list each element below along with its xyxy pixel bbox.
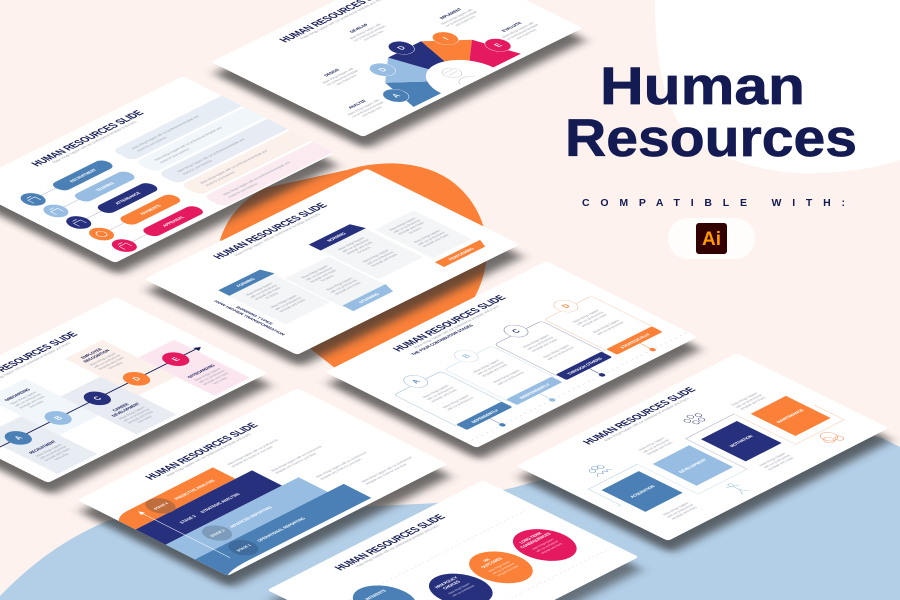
pill: recruitment [53,160,112,190]
card text: Make things happen [388,217,417,231]
band: strategic analysis: STAGE 3 [178,514,198,524]
text blocks: Make things happen [637,437,666,451]
text blocks: template and charts [670,506,699,520]
label: develop: Make things happen with [348,23,382,40]
card B: Make things happen [492,369,521,383]
right text blocks: Make things happen with our professional [315,451,368,478]
label: implement: IMPLEMENT [438,7,463,20]
card text: for teams [264,292,280,299]
header: norming [309,222,366,251]
card B: B [460,353,473,359]
card B: template and charts [481,363,509,377]
slide subtitle: Make things happen with our professional template and charts [165,433,252,477]
sub heading: THE FOUR CONTRIBUTION STAGES [410,323,474,356]
fan chart: D [376,66,390,73]
card B [433,340,578,413]
icon: development figure [724,482,751,495]
text: onboarding [2,387,51,412]
connector lines [40,188,148,242]
cards [0,340,250,474]
slide title: HUMAN RESOURCES SLIDE [211,202,331,261]
card D: STRATEGICALLY [618,332,652,349]
main title [565,57,857,168]
band: operational reporting [195,484,376,576]
circle: interests [340,579,429,600]
band: strategic analysis: STRATEGIC ANALYSIS [199,492,241,514]
card D: with our professional [576,311,605,326]
text: employee recognition: EMPLOYEE [79,347,103,359]
slide: pills list [0,71,345,275]
pill: appraisal [143,206,203,236]
circle: high policy choices: HRM POLICY [433,576,459,589]
pill: attendance [98,183,158,213]
stage circles: STAGE 2 [209,529,226,538]
card text: with our professional [365,251,395,265]
card text: with our professional [273,296,303,311]
square: maintenance [751,396,831,436]
label: analyze: our professional template [350,101,385,118]
square: acquisition [602,471,683,512]
circle: long-term consequences [500,523,589,567]
square: acquisition: ACQUISITION [629,485,656,499]
card A: with our professional [446,396,475,411]
text rows [116,96,333,206]
text: recruitment: Make things happen [34,443,63,458]
text: offboarding: OFFBOARDING [186,363,217,379]
slide: DADIE fan [211,0,586,149]
label: design: Make things happen with [321,67,355,84]
slide subtitle: Make things happen with our professional template and charts [603,397,690,442]
card B: INDEPENDENTLY [518,383,552,400]
card B: Make things happen [472,359,501,373]
card text: Make things happen [413,229,442,244]
serpentine frame [585,389,844,521]
cards [229,207,474,329]
card text: with our professional [249,284,278,299]
card text: Make things happen [325,277,354,291]
card A [382,365,528,438]
text rows: Make things happen with our professional template and [153,126,223,161]
badge: Ai: Ai [702,229,721,250]
right text blocks: Make things happen with our professional [360,456,414,483]
card A: Make things happen [421,384,450,399]
white blob top right [655,0,900,173]
card C: with our professional [546,346,575,361]
label: analyze: and charts here [361,106,384,117]
card text [246,218,448,312]
card text: template and charts [309,269,338,283]
text: employee recognition: here today [107,361,124,370]
slide subtitle: Make things happen with our professional template and charts [355,524,440,568]
card C: with our professional [526,336,555,351]
text: recruitment: with our professional [38,445,68,460]
footer: storming [342,284,397,311]
text: employee recognition: with our professional [93,354,122,369]
label: analyze: ANALYZE [347,99,368,109]
right text blocks: Make things happen with our professional [270,445,323,472]
fan chart: D [395,44,408,51]
card text: Make things happen [361,249,390,263]
text blocks: with our professional [641,439,671,454]
right text blocks [226,413,418,510]
card text: with our professional [392,219,422,234]
text: onboarding: here today [28,400,45,408]
fan chart: I [440,36,451,41]
node B [44,411,72,425]
pill: training: TRAINING [94,181,116,192]
slide: timeline [0,297,271,495]
slide: circles [267,480,642,600]
card text: template and charts [254,286,282,300]
slide subtitle: Make things happen with our professional template and charts [413,305,500,349]
card D [532,290,678,363]
blue blob [0,420,900,600]
text blocks: template and charts [739,396,767,410]
card A: DEPENDENTLY [470,408,500,424]
slide subtitle: Make things happen with our professional template and charts [51,120,138,164]
compatible with: COMPATIBLE WITH: [582,197,845,209]
card text: for teams [320,274,335,282]
circle: high policy choices [416,567,505,600]
slide title: HUMAN RESOURCES SLIDE [29,109,147,168]
circle: long-term consequences: CONSEQUENCES [519,532,552,549]
circle: high policy choices: CHOICES [441,580,462,590]
text: offboarding: here today [212,376,229,385]
band: predictive analysis: PREDICTIVE ANALYSIS [173,479,216,501]
icon: maintenance gears [815,430,845,445]
circle: hr outcomes: OUTCOMES [479,557,504,569]
card text: template and charts [346,241,374,255]
text: career development: template and charts [126,410,155,424]
badge: Ai [668,218,755,259]
card text: Make things happen [269,294,298,309]
circle: hr outcomes: HR [481,557,492,563]
text: offboarding: template and charts [202,371,230,386]
text rows: charts for your business [204,171,237,187]
text: onboarding: with our professional [13,393,43,407]
band: operational reporting: OPERATIONAL REPORTING [256,516,307,542]
text: recruitment: here today [53,452,70,461]
text: offboarding: with our professional [197,369,226,384]
text: career development: with our professional [122,408,151,422]
node C: C [91,395,104,402]
card text: with our professional [304,267,334,281]
square: motivation [701,421,782,461]
text: offboarding [186,363,235,388]
text: onboarding: Make things happen [9,391,38,405]
dotted baseline [466,332,688,443]
text: career development: DEVELOPMENT [110,402,141,418]
circle: long-term consequences: Make things happen [531,538,555,550]
card A: with our professional [425,386,455,401]
pill: payments [120,194,180,224]
card text: template and charts [397,221,425,235]
text: recruitment: RECRUITMENT [27,440,58,455]
text: employee recognition: Make things happen [89,352,117,366]
text blocks [584,390,842,520]
text blocks: with our professional [762,454,792,469]
stage circles [139,494,266,558]
text blocks: Make things happen [758,452,787,467]
square: maintenance: MAINTENANCE [775,408,805,424]
text: recruitment: template and charts [43,447,71,462]
label: design: DESIGN [323,68,341,77]
card C: THROUGH OTHERS [566,357,604,376]
stage circles: STAGE 1 [236,544,252,552]
text rows: Make things happen with our professional template and [199,149,269,184]
text: employee recognition: template and charts [97,356,126,370]
slide: forming norming [144,169,523,367]
band: advanced reporting [166,477,330,560]
slide: four contribution stages [325,261,701,460]
card text: template and charts [421,233,450,248]
text: career development: here today [136,415,153,424]
card D: D [559,303,573,309]
text: employee recognition: RECOGNITION [82,349,111,363]
label: implement: Make things happen with [440,8,474,25]
node D [122,372,150,386]
card text: with our professional [417,231,446,246]
card text: Make things happen [300,265,329,279]
slide subtitle: Make things happen with our professional template and charts [234,213,321,256]
card C: template and charts [530,338,559,352]
card text: with our professional [341,238,370,253]
text blocks: with our professional [734,394,764,409]
main title: Human [600,57,805,116]
text rows: charts for your business [158,147,191,164]
label: evaluate: and charts here [515,28,538,40]
circle: hr outcomes: Make things happen [487,560,512,573]
card text: for teams [356,246,372,254]
timeline arrow [0,346,204,455]
card C: Make things happen [542,344,571,358]
icon: acquisition people [585,463,612,477]
slide: four squares [516,353,892,553]
pill: appraisal: APPRAISAL [161,215,186,227]
node C [84,392,111,406]
vertical arrow [136,510,232,559]
slide: analysis stairs [77,388,451,588]
dotted lines [326,509,609,600]
text: employee recognition [76,346,130,373]
card D: with our professional [596,321,625,336]
slide title: HUMAN RESOURCES SLIDE [391,294,510,353]
pill: payments: PAYMENTS [139,204,162,216]
text: career development: Make things happen [118,406,146,420]
card text: with our professional [329,279,359,294]
label: evaluate: EVALUATE [500,21,523,32]
card A: template and charts [430,389,458,403]
pill: attendance: ATTENDANCE [114,191,142,205]
text: offboarding: Make things happen [193,367,222,382]
pill: recruitment: RECRUITMENT [68,168,98,183]
card B: with our professional [476,361,505,376]
footer: storming: STORMING [357,292,381,304]
rotated side heading: BONDING TYPES [235,306,274,325]
node D: D [130,375,144,382]
label: evaluate: Make things happen with [501,21,535,38]
pill: training [75,172,134,202]
node E [162,352,190,366]
fan chart: A [389,92,403,99]
footer: performing: PERFORMING [447,247,476,261]
text: onboarding: template and charts [18,395,46,409]
label: develop: DEVELOP [348,23,370,33]
circle: long-term consequences: with our professional [535,540,560,553]
circle: hr outcomes [456,545,546,590]
fan chart [370,32,521,107]
card D: Make things happen [592,319,621,334]
card text: Make things happen [245,282,274,296]
circle: hr outcomes: with our professional [491,562,516,575]
header: forming: FORMING [235,277,257,288]
card text: template and charts [334,281,362,295]
icon: motivation network [680,412,709,426]
node A: A [12,434,25,441]
card A: A [409,378,423,385]
slide title: HUMAN RESOURCES SLIDE [581,386,699,446]
label: develop: our professional template [352,25,387,42]
right text blocks: template and charts for your team [230,445,274,468]
footer: performing [435,240,489,267]
card C: C [509,328,523,334]
card D: Make things happen [572,309,600,323]
right text blocks: template and charts for your team [274,452,318,474]
text: career development: CAREER [111,402,131,412]
text rows: charts for your business [181,159,214,175]
stage circles: STAGE 4 [153,502,170,510]
label: design: our professional template [325,69,360,86]
label: analyze: Make things happen with [346,99,381,116]
card C: Make things happen [522,334,551,348]
circle: long-term consequences: LONG-TERM [518,531,543,544]
orange blob [220,163,487,372]
circle: high policy choices: Make things happen [447,582,471,595]
text: onboarding: ONBOARDING [3,387,32,402]
circle: high policy choices: with our professional [451,584,476,597]
text rows: Make things happen with our professional template and [176,138,246,173]
slide title: HUMAN RESOURCES SLIDE [333,513,449,572]
label: develop: and charts here [362,30,385,41]
text rows: Make things happen with our professional template and [131,115,200,150]
node E: E [169,356,182,362]
card A: Make things happen [442,394,470,409]
card text: for teams [408,227,423,234]
node B: B [52,415,65,421]
text rows: charts for your business [136,136,168,152]
square: motivation: MOTIVATION [728,434,754,448]
text rows: Make things happen with our professional template and [222,161,291,196]
rotated side heading: HOW HIGHER TRANSFORMATION [213,300,286,336]
card B: with our professional [496,371,525,386]
text: recruitment [27,440,76,464]
label: evaluate: our professional template [505,23,540,41]
square: development [653,445,733,486]
card D: template and charts [580,313,609,327]
card C [483,315,628,388]
text blocks: template and charts [767,456,795,471]
card text: template and charts [370,253,399,267]
node A [4,431,32,445]
slide title: HUMAN RESOURCES SLIDE [143,422,262,482]
text blocks: Make things happen [730,392,759,406]
text blocks: template and charts [646,441,674,455]
card text: template and charts [278,299,307,313]
label: implement: and charts here [454,15,477,27]
band: predictive analysis [113,467,235,530]
right text blocks: template and charts for your team [319,458,363,480]
label: implement: our professional template [444,10,479,27]
header: norming: NORMING [326,231,348,242]
text rows: charts for your business [227,182,259,198]
header: forming [218,268,275,296]
right text blocks: Make things happen with our professional [226,438,280,466]
text blocks: with our professional [666,503,695,518]
circle: long-term consequences: template and charts [540,542,564,554]
right text blocks: template and charts for your team [364,463,408,485]
text: career development [105,399,160,427]
band: strategic analysis [136,470,282,545]
card text: Make things happen [337,236,366,251]
label: design: and charts here [335,74,358,86]
square: development: DEVELOPMENT [677,458,709,474]
band: advanced reporting: ADVANCED REPORTING [228,505,274,528]
fan chart: E [492,42,505,48]
icon circles [20,193,137,252]
text blocks: Make things happen [662,501,690,516]
circle: hr outcomes: template and charts [496,564,520,577]
main title: Resources [565,109,857,168]
